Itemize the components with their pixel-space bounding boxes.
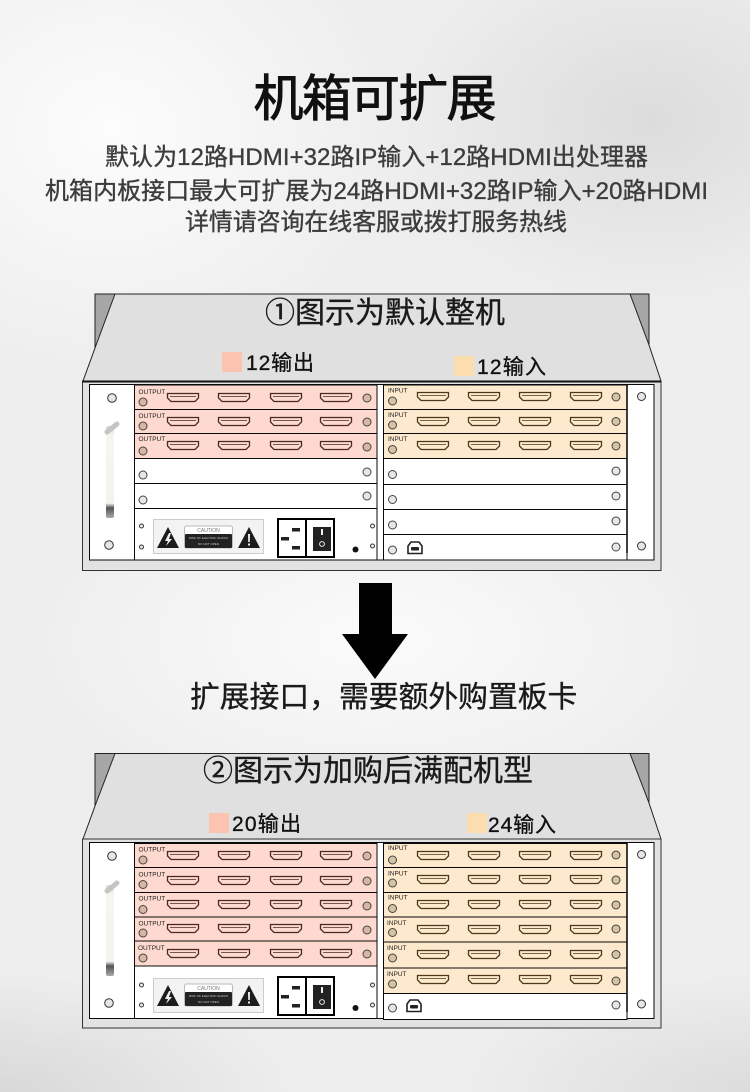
input card 3 (384, 434, 627, 458)
output card 2: OUTPUT (138, 872, 165, 878)
caution label (154, 978, 264, 1012)
input card 2: INPUT (388, 412, 408, 419)
intro text (45, 144, 708, 236)
input card 4: INPUT (387, 920, 407, 927)
input card 2 (384, 410, 627, 434)
output card 5 (134, 941, 377, 966)
output card 2 (134, 410, 377, 434)
input card 5: INPUT (387, 945, 407, 952)
caution label: RISK OF ELECTRIC SHOCK (189, 994, 228, 998)
heading: fully configured: ②图示为加购后满配机型 (203, 755, 533, 788)
chassis body (82, 839, 661, 1028)
chassis lid (83, 294, 661, 381)
output card 4 (134, 917, 377, 941)
control card with USB port (384, 534, 627, 560)
left ear with handle (105, 852, 117, 1007)
caution label: RISK OF ELECTRIC SHOCK (189, 536, 228, 540)
intro text: 默认为12路HDMI+32路IP输入+12路HDMI出处理器 (105, 144, 648, 171)
chassis body (82, 381, 661, 570)
caution label: DO NOT OPEN (198, 542, 219, 546)
control card with USB port (384, 994, 627, 1020)
input card 5 (384, 942, 627, 968)
power socket and switch (278, 977, 334, 1015)
output card 1 (134, 844, 377, 868)
caution label (154, 520, 264, 554)
heading: default machine: ①图示为默认整机 (265, 297, 505, 330)
panel: default machine (82, 294, 661, 570)
input card 3: INPUT (388, 436, 408, 443)
output card 5: OUTPUT (138, 945, 165, 952)
legend: 20 outputs: 20输出 (232, 813, 301, 836)
expansion caption: 扩展接口，需要额外购置板卡 (190, 681, 577, 714)
title: 机箱可扩展 (254, 71, 496, 127)
input card 3: INPUT (388, 894, 408, 902)
input card 6 (384, 968, 627, 994)
empty output slot 2 (134, 484, 377, 508)
empty output slot 1 (134, 458, 377, 484)
caution label: CAUTION (197, 528, 220, 534)
output card 3: OUTPUT (138, 896, 165, 902)
empty input slot 1 (384, 458, 627, 484)
legend: 12 inputs: 12输入 (477, 356, 546, 379)
input card 1: INPUT (388, 388, 408, 394)
output card 1 (134, 385, 377, 410)
legend: 24 inputs: 24输入 (488, 814, 556, 837)
output card 2 (134, 868, 377, 892)
chassis lid (83, 754, 661, 839)
input card 1: INPUT (388, 845, 408, 852)
output card 1: OUTPUT (138, 846, 165, 854)
output card 2: OUTPUT (138, 413, 165, 420)
output card 3 (134, 892, 377, 917)
left ear with handle (105, 394, 117, 549)
input card 4 (384, 917, 627, 942)
output card 3 (134, 434, 377, 458)
input card 2 (384, 868, 627, 892)
power module (134, 966, 377, 1018)
right ear (627, 843, 646, 1012)
right ear (627, 385, 646, 553)
power module (134, 508, 377, 560)
input card 2: INPUT (388, 870, 408, 878)
output card 1: OUTPUT (138, 389, 165, 396)
empty input slot 3 (384, 510, 627, 534)
empty input slot 2 (384, 484, 627, 510)
input card 1 (384, 844, 627, 868)
caution label: DO NOT OPEN (198, 1000, 219, 1004)
output card 3: OUTPUT (138, 436, 165, 443)
input card 3 (384, 892, 627, 917)
output card 4: OUTPUT (138, 920, 165, 928)
arrow (342, 583, 408, 679)
input card 1 (384, 385, 627, 410)
legend: 12 outputs: 12输出 (246, 352, 314, 375)
intro text: 详情请咨询在线客服或拨打服务热线 (185, 209, 567, 236)
input card 6: INPUT (387, 971, 407, 978)
power socket and switch (278, 519, 334, 557)
caution label: CAUTION (197, 986, 220, 992)
intro text: 机箱内板接口最大可扩展为24路HDMI+32路IP输入+20路HDMI (45, 178, 708, 205)
panel: fully configured machine (82, 754, 661, 1028)
